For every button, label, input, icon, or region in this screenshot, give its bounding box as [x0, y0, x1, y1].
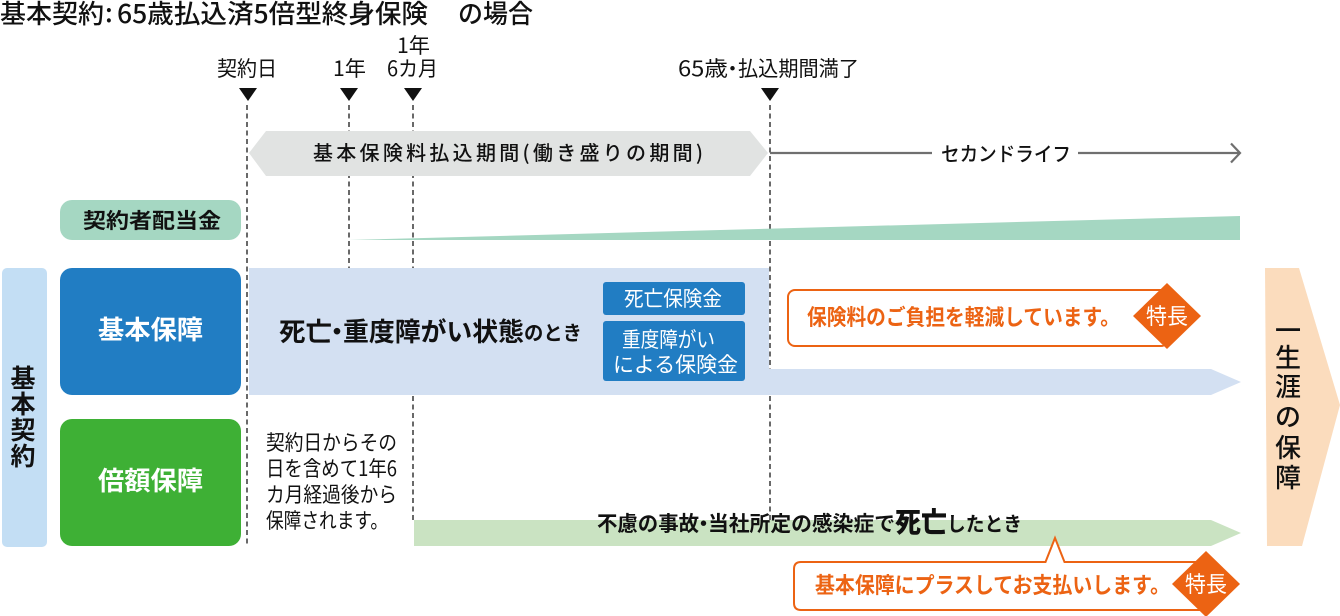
marker: age 65 end of payment period: [678, 53, 859, 101]
badge: feature: [1133, 283, 1201, 349]
box: death benefit: 死亡保険金: [624, 283, 722, 313]
text: no toki: のとき: [524, 317, 582, 346]
callout: paid in addition to basic coverage: [794, 538, 1240, 616]
panel: basic coverage: [60, 268, 241, 395]
badge: feature: 特長: [1185, 567, 1227, 599]
panel: basic contract: [2, 268, 47, 547]
panel: double coverage: 倍額保障: [98, 461, 203, 498]
marker: age 65 end of payment period: ・: [722, 53, 743, 83]
marker: 1 year 6 months: 6カ月: [387, 53, 438, 83]
timeline markers: [217, 30, 859, 101]
text: double coverage waiting period: カ月経過後から: [266, 479, 397, 509]
text: death or severe disability: 重度障がい状態: [343, 312, 524, 349]
panel: basic coverage: 基本保障: [98, 310, 203, 347]
panel: basic contract: 基: [10, 359, 36, 395]
arrow: lifelong coverage: 一: [1275, 311, 1301, 348]
text: death emphasised: 死亡: [895, 501, 947, 541]
title: [0, 0, 533, 31]
text: death or severe disability: ・: [324, 312, 350, 349]
wedge: dividend growth: [349, 216, 1240, 240]
arrow: lifelong coverage: 障: [1275, 458, 1301, 495]
marker: age 65 end of payment period: 払込期間満了: [738, 53, 859, 83]
label: policyholder dividend: 契約者配当金: [83, 205, 221, 235]
text: accidental death condition: 当社所定の感染症で: [708, 508, 895, 538]
arrow: lifelong coverage: [1265, 268, 1340, 546]
panel: basic contract: 契: [10, 411, 36, 447]
callout: paid in addition to basic coverage: 基本保障にプラスしてお支払いします。: [815, 568, 1170, 600]
marker: 1 year: [333, 53, 366, 101]
arrow: premium payment period: [249, 131, 768, 176]
callout: premium reduction: [788, 283, 1201, 349]
arrow: second life: セカンドライフ: [941, 138, 1071, 167]
callout: premium reduction: 保険料のご負担を軽減しています。: [807, 300, 1120, 332]
marker: 1 year: 1年: [333, 53, 366, 83]
arrow: lifelong coverage: 生: [1275, 338, 1301, 375]
arrow: lifelong coverage: 涯: [1275, 367, 1301, 404]
marker: contract date: 契約日: [217, 53, 277, 83]
marker: contract date: [217, 53, 277, 101]
box: severe disability benefit: 重度障がい: [622, 324, 715, 354]
text: accidental death condition: ・: [693, 508, 714, 538]
arrow: premium payment period: 基本保険料払込期間(働き盛りの期間): [313, 137, 703, 166]
panel: basic contract: 本: [10, 385, 36, 421]
text: double coverage waiting period: 契約日からその: [266, 427, 397, 457]
arrow: second life: [770, 138, 1240, 167]
text: double coverage waiting period: [266, 427, 397, 535]
label: policyholder dividend: [60, 200, 241, 240]
arrow: lifelong coverage: 保: [1275, 428, 1301, 465]
marker: 1 year 6 months: 1年: [397, 30, 430, 60]
box: severe disability benefit: による保険金: [613, 349, 738, 379]
text: death or severe disability: 死亡: [279, 312, 332, 349]
box: severe disability benefit: [603, 321, 745, 381]
text: when occurs: したとき: [947, 508, 1022, 537]
badge: feature: [1172, 551, 1240, 616]
text: double coverage waiting period: 保障されます。: [266, 505, 388, 535]
text: accidental death condition: [597, 508, 895, 538]
band: double coverage arrow: [414, 501, 1241, 546]
panel: basic contract: 約: [10, 437, 36, 473]
text: accidental death condition: 不慮の事故: [597, 508, 699, 538]
marker: age 65 end of payment period: 65歳: [678, 53, 728, 83]
band: basic coverage lifetime arrow: [249, 268, 1241, 395]
text: double coverage waiting period: 日を含めて1年6: [266, 453, 397, 483]
box: death benefit: [603, 282, 745, 315]
panel: double coverage: [60, 419, 241, 546]
marker: 1 year 6 months: [387, 30, 438, 101]
arrow: lifelong coverage: の: [1275, 397, 1301, 434]
badge: feature: 特長: [1146, 299, 1188, 331]
